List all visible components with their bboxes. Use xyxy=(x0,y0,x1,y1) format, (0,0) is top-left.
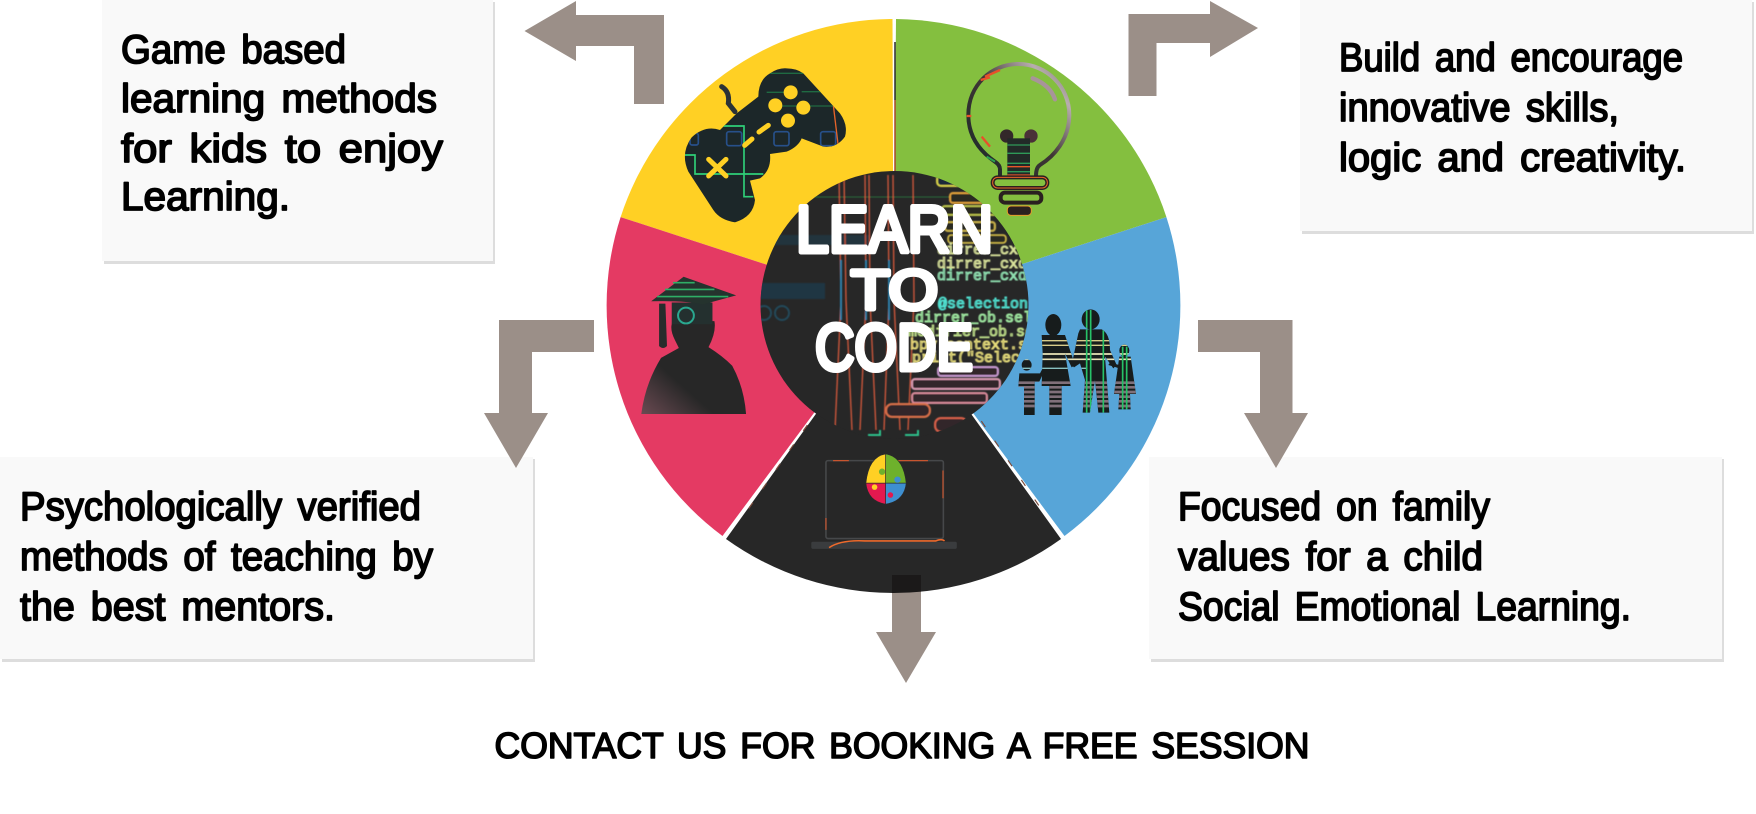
panel: innovative skills xyxy=(1300,0,1754,234)
text: game based learning: for kids to enjoy xyxy=(121,127,443,171)
centre circle: code backdrop xyxy=(760,171,1028,437)
panel: game based learning xyxy=(102,0,495,264)
panel: psychologically verified methods xyxy=(0,457,535,662)
arrow: to game based panel xyxy=(524,1,664,104)
segment: yellow xyxy=(621,19,894,306)
bottom arrow xyxy=(876,575,936,683)
segment: blue xyxy=(894,217,1180,536)
centre circle: code backdrop: modifier_ob.select xyxy=(908,324,1070,341)
title: learn to code xyxy=(796,192,993,384)
text: psychologically verified methods: Psychologically verified xyxy=(20,485,421,529)
icon: graduate silhouette xyxy=(641,277,746,414)
centre circle: code backdrop: dirrer_cxd.use xyxy=(937,256,1063,273)
wheel: five coloured segments xyxy=(607,19,1180,593)
segment: dark xyxy=(726,306,1061,593)
text: family values: Focused on family xyxy=(1178,485,1490,529)
centre circle: code backdrop: print("Selected") xyxy=(912,350,1065,367)
icon: light bulb xyxy=(967,64,1069,215)
icon: laptop outline xyxy=(811,461,957,549)
text: game based learning: Learning. xyxy=(121,175,290,219)
text: game based learning: learning methods xyxy=(121,77,437,121)
segment: red xyxy=(607,217,894,536)
icon: game controller xyxy=(684,68,846,222)
icon: family silhouette xyxy=(1018,309,1136,415)
segment: green xyxy=(894,19,1166,306)
text: game based learning: Game based xyxy=(121,28,346,72)
arrow: to psychology panel xyxy=(484,320,594,468)
text: game based learning xyxy=(121,28,443,219)
text: psychologically verified methods: methods of teaching by xyxy=(20,535,433,579)
text: psychologically verified methods: the best mentors. xyxy=(20,585,335,629)
centre circle: code backdrop: dirrer_ob.select= 1 xyxy=(915,310,1086,327)
text: family values: Social Emotional Learning. xyxy=(1178,585,1631,629)
centre circle: code backdrop: dirrer_cxd.use xyxy=(937,268,1063,285)
text: innovative skills: innovative skills, xyxy=(1339,86,1619,130)
text: innovative skills xyxy=(1339,36,1686,180)
text: innovative skills: Build and encourage xyxy=(1339,36,1683,80)
neon trim on dark segment xyxy=(742,421,1045,518)
title: learn to code: TO xyxy=(851,258,938,321)
panel: family values xyxy=(1149,457,1724,662)
arrow: to innovative skills panel xyxy=(1128,1,1258,96)
text: psychologically verified methods xyxy=(20,485,433,629)
text: innovative skills: logic and creativity. xyxy=(1339,136,1686,180)
title: learn to code: LEARN xyxy=(796,192,993,266)
arrow: to family panel xyxy=(1198,320,1308,468)
centre circle: code backdrop: dirrer_cxd.use xyxy=(937,242,1063,259)
call to action: CONTACT US FOR BOOKING A FREE SESSION xyxy=(494,725,1310,766)
icons drawn on wheel xyxy=(641,277,1045,549)
icon: puzzle brain xyxy=(866,454,906,504)
title: learn to code: CODE xyxy=(815,310,973,384)
text: family values: values for a child xyxy=(1178,535,1483,579)
text: family values xyxy=(1178,485,1631,629)
centre circle: code backdrop: bpy.context.scene. xyxy=(910,337,1072,354)
centre circle: code backdrop: @selection at t xyxy=(938,296,1073,313)
